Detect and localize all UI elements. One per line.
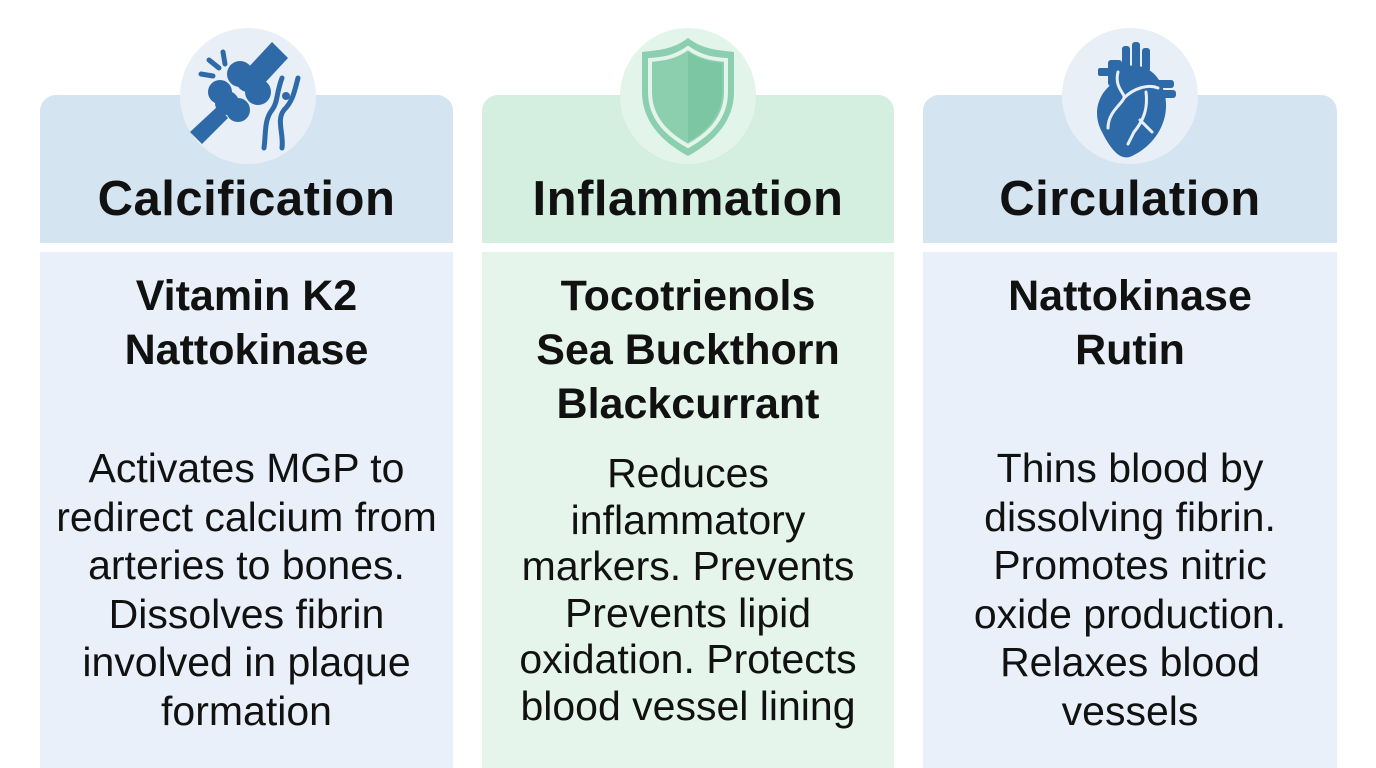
description: calcification: Dissolves fibrin bbox=[109, 590, 384, 636]
body: circulation bbox=[923, 252, 1337, 768]
description: calcification: formation bbox=[161, 688, 332, 734]
body: inflammation bbox=[482, 252, 894, 768]
header: inflammation: Inflammation bbox=[533, 172, 843, 226]
description: inflammation bbox=[519, 450, 857, 729]
ingredients: inflammation: Blackcurrant bbox=[557, 380, 819, 428]
panel: inflammation bbox=[482, 95, 894, 768]
header: inflammation bbox=[482, 95, 894, 243]
description: calcification bbox=[56, 445, 437, 734]
description: calcification: involved in plaque bbox=[82, 639, 411, 685]
description: inflammation: Reduces bbox=[607, 450, 769, 496]
description: circulation: oxide production. bbox=[974, 590, 1286, 636]
ingredients: circulation: Nattokinase bbox=[1008, 272, 1252, 320]
ingredients: calcification: Nattokinase bbox=[125, 326, 368, 374]
ingredients: circulation bbox=[1008, 272, 1252, 374]
panel: circulation bbox=[923, 95, 1337, 768]
icon: heart bbox=[1062, 28, 1198, 164]
description: circulation: Promotes nitric bbox=[993, 542, 1267, 588]
ingredients: calcification: Vitamin K2 bbox=[136, 272, 357, 320]
header: circulation: Circulation bbox=[999, 172, 1261, 226]
ingredients: inflammation bbox=[536, 272, 840, 428]
description: inflammation: inflammatory bbox=[571, 497, 805, 543]
header: calcification bbox=[40, 95, 453, 243]
icon: bone joint and vessel bbox=[180, 28, 316, 164]
header: calcification: Calcification bbox=[98, 172, 395, 226]
description: calcification: arteries to bones. bbox=[88, 542, 405, 588]
description: circulation: Relaxes blood bbox=[1000, 639, 1260, 685]
header: circulation bbox=[923, 95, 1337, 243]
icon: shield bbox=[620, 28, 756, 164]
description: circulation: vessels bbox=[1062, 688, 1198, 734]
body: calcification bbox=[40, 252, 453, 768]
description: calcification: Activates MGP to bbox=[89, 445, 404, 491]
description: inflammation: Prevents lipid bbox=[565, 590, 811, 636]
description: circulation bbox=[974, 445, 1286, 734]
ingredients: inflammation: Tocotrienols bbox=[561, 272, 815, 320]
ingredients: inflammation: Sea Buckthorn bbox=[536, 326, 840, 374]
description: circulation: Thins blood by bbox=[997, 445, 1263, 491]
description: inflammation: blood vessel lining bbox=[520, 683, 856, 729]
panel: calcification bbox=[40, 95, 453, 768]
ingredients: calcification bbox=[125, 272, 368, 374]
description: inflammation: oxidation. Protects bbox=[519, 636, 857, 682]
ingredients: circulation: Rutin bbox=[1075, 326, 1185, 374]
description: inflammation: markers. Prevents bbox=[522, 543, 854, 589]
description: circulation: dissolving fibrin. bbox=[984, 494, 1276, 540]
description: calcification: redirect calcium from bbox=[56, 494, 437, 540]
